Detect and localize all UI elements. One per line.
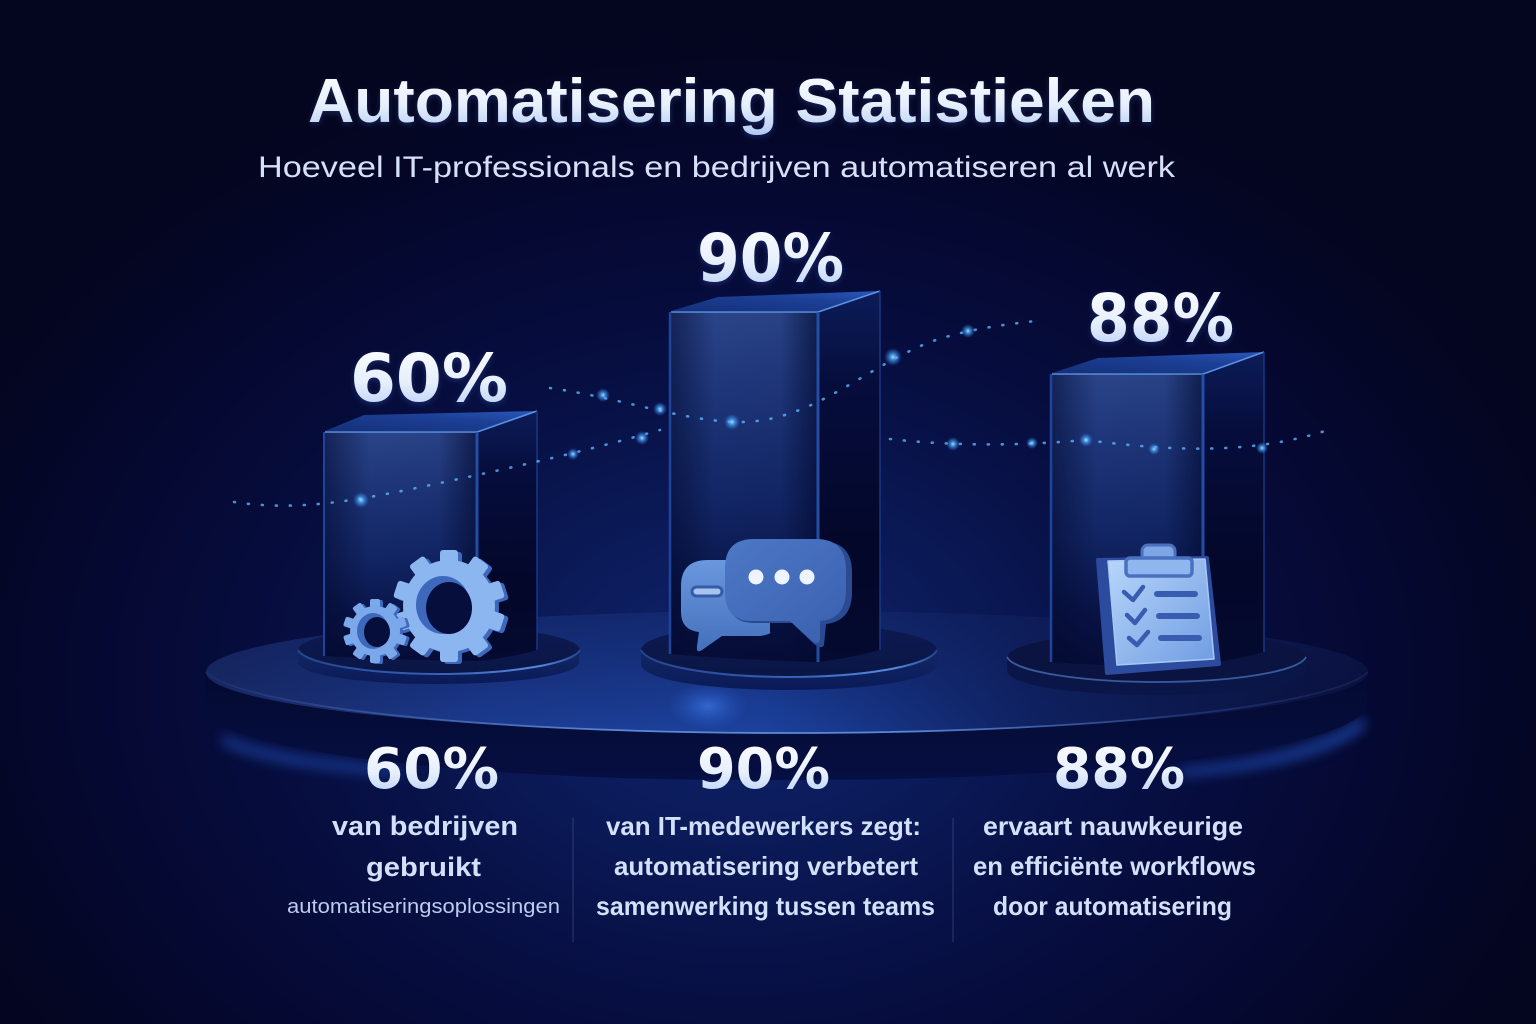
stat description 1: van bedrijven <box>332 811 518 841</box>
stat description 1 <box>287 811 560 918</box>
big value 88%: 88% <box>1087 280 1234 357</box>
platform <box>205 611 1368 780</box>
stat value 90%: 90% <box>697 737 830 802</box>
subtitle: Hoeveel IT-professionals en bedrijven automatiseren al werk <box>258 151 1176 184</box>
stat description 3 <box>973 811 1256 921</box>
pedestal disc 2 <box>641 623 937 690</box>
stat description 1: automatiseringsoplossingen <box>287 896 560 918</box>
stat column 3 <box>973 737 1256 921</box>
pedestal disc 3 <box>1007 632 1306 695</box>
stat description 3: en efficiënte workflows <box>973 851 1256 881</box>
stat description 1: gebruikt <box>366 852 481 882</box>
bar 3: 88% <box>1051 352 1264 666</box>
pedestal disc 1 <box>298 626 580 684</box>
stat value 60%: 60% <box>364 737 499 802</box>
big value 90%: 90% <box>697 220 844 297</box>
stat description 2: samenwerking tussen teams <box>596 891 935 921</box>
stat description 2 <box>596 811 935 921</box>
dotted trend line left <box>234 430 660 508</box>
big value 60%: 60% <box>350 340 508 417</box>
stat description 3: ervaart nauwkeurige <box>983 811 1243 841</box>
icon: gears <box>343 550 509 664</box>
icon: chat bubbles <box>681 539 852 651</box>
bar 1: 60% <box>324 411 537 661</box>
bar 2: 90% <box>670 291 880 662</box>
dotted trend line right <box>890 431 1325 455</box>
stat column 1 <box>287 737 560 918</box>
icon: clipboard with checklist <box>1098 545 1219 673</box>
stat value 88%: 88% <box>1053 737 1185 802</box>
stat description 2: van IT-medewerkers zegt: <box>606 811 921 841</box>
stat description 3: door automatisering <box>993 891 1232 921</box>
stat column 2 <box>596 737 935 921</box>
title: Automatisering Statistieken <box>308 67 1155 136</box>
stat description 2: automatisering verbetert <box>614 851 918 881</box>
dotted trend line middle <box>550 320 1044 430</box>
